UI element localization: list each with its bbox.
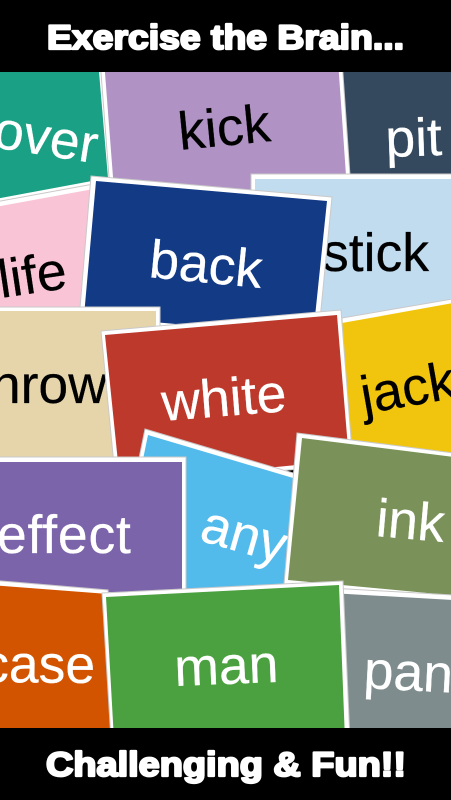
- card: kick: kick: [175, 94, 273, 162]
- card: over: [0, 72, 108, 201]
- card: man: man: [173, 635, 279, 698]
- tagline: Challenging & Fun!!: [46, 746, 406, 784]
- card: kick: [100, 60, 351, 190]
- card: pit: [343, 72, 451, 174]
- card: white: [101, 310, 353, 486]
- card: stick: [250, 174, 451, 318]
- card: any: [138, 428, 294, 588]
- card: stick: stick: [322, 224, 429, 283]
- card: white: white: [158, 364, 288, 433]
- title: Exercise the Brain...: [47, 19, 404, 57]
- card: back: [79, 176, 332, 340]
- card: back: back: [147, 230, 265, 300]
- card: case: [0, 580, 110, 728]
- card: ink: [284, 433, 451, 602]
- card: life: [0, 184, 90, 306]
- card: pan: [344, 588, 451, 728]
- card: ink: ink: [374, 489, 447, 554]
- card: jack: [342, 298, 451, 452]
- card: any: any: [195, 495, 294, 575]
- card: pit: pit: [384, 108, 443, 169]
- card: effect: [0, 457, 186, 592]
- card: effect: effect: [0, 506, 132, 565]
- card: throw: [0, 306, 160, 456]
- card: man: [102, 581, 350, 740]
